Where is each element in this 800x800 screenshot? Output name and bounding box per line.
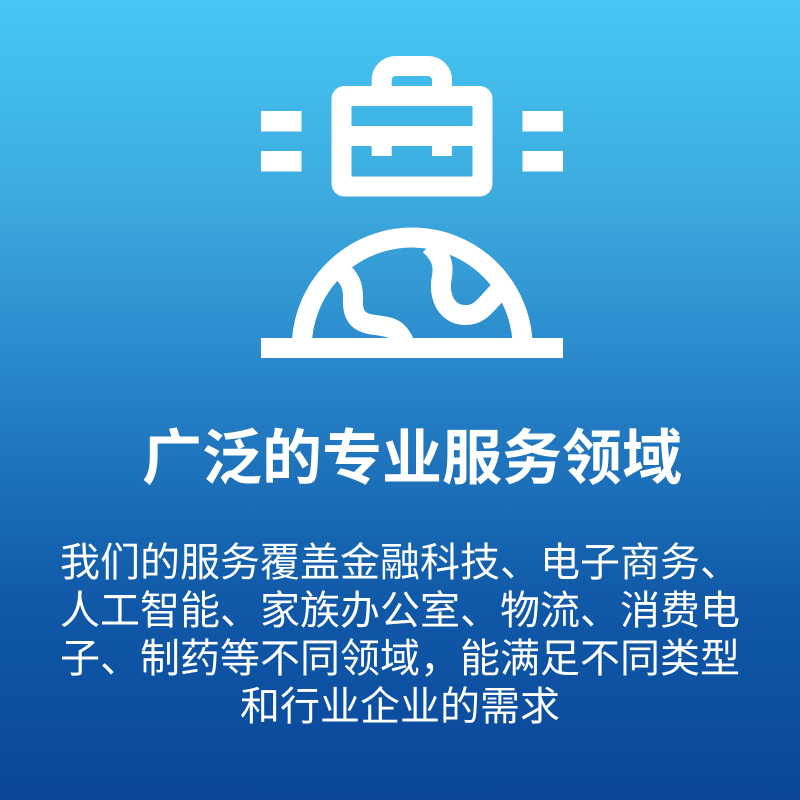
body text: 我们的服务覆盖金融科技、电子商务、 — [60, 541, 740, 585]
icon: briefcase — [342, 66, 482, 186]
icon: globe — [261, 238, 563, 358]
body text: 子、制药等不同领域，能满足不同类型 — [60, 637, 740, 681]
title: 广泛的专业服务领域 — [142, 425, 682, 492]
body text — [60, 541, 740, 729]
icon: right dashes — [522, 111, 563, 172]
body text: 人工智能、家族办公室、物流、消费电 — [60, 589, 740, 633]
body text: 和行业企业的需求 — [240, 685, 560, 729]
icon: left dashes — [261, 111, 302, 172]
